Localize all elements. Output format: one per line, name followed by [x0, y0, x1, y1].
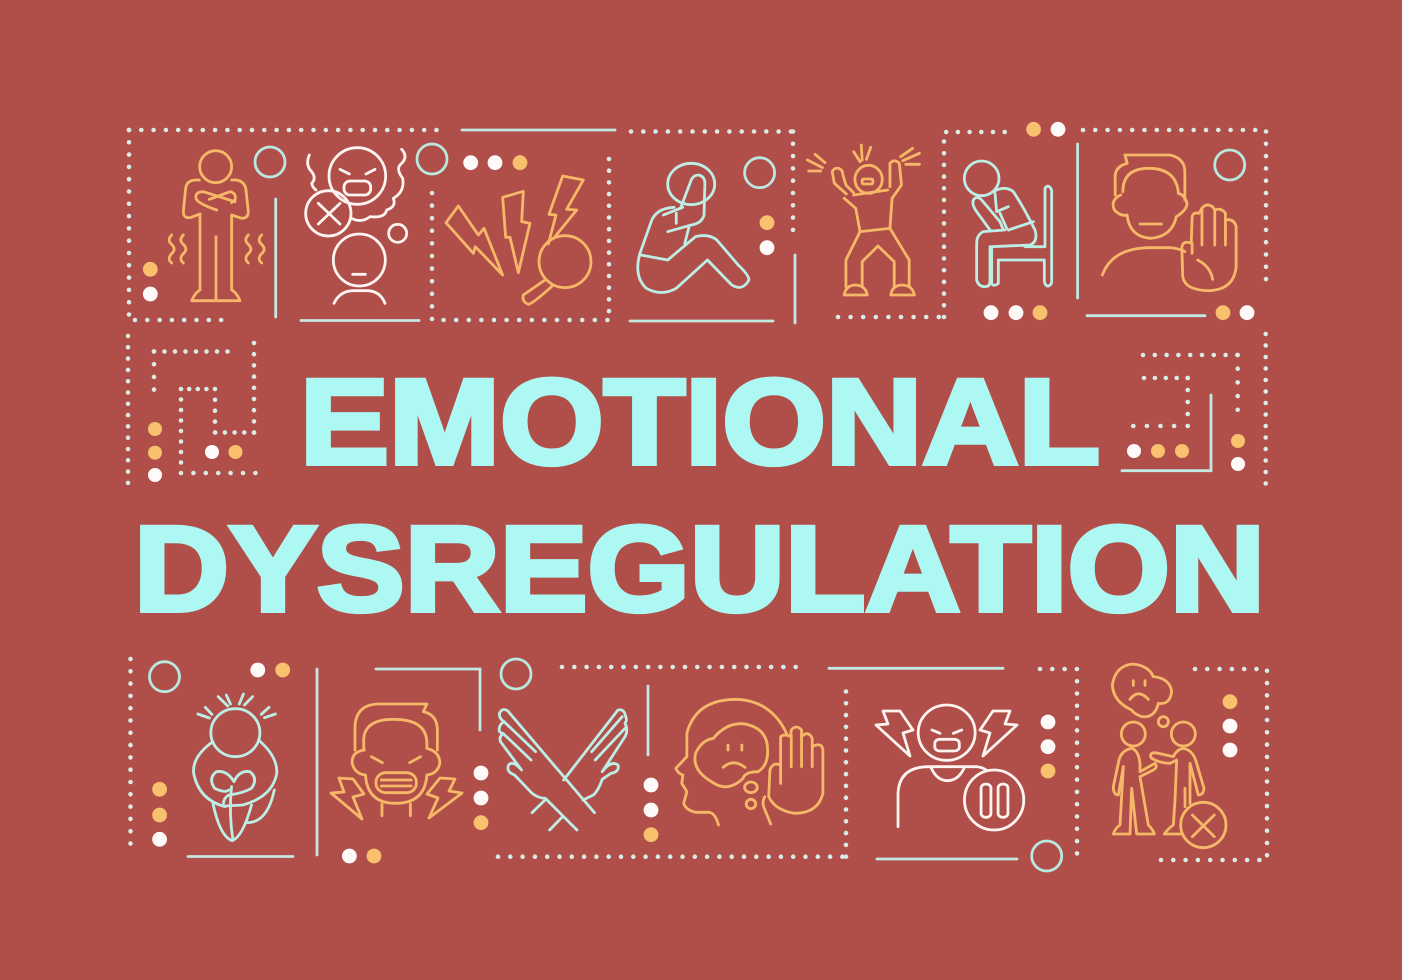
- icon: man with stop hand: [1102, 155, 1236, 291]
- title: [134, 354, 1265, 636]
- decorative frames top row: [129, 130, 1266, 323]
- icon: screaming person with raised arms: [807, 145, 919, 295]
- icon: yelling man with lightning bolts: [331, 704, 462, 819]
- icon: sad person sitting on chair: [964, 161, 1052, 287]
- icon: head with sad thought and stop hand: [676, 699, 823, 825]
- decorative frames bottom row: [130, 659, 1267, 871]
- icon: person hugging stomach in pain: [194, 694, 277, 841]
- icon: angry face over calm face: [306, 148, 407, 303]
- decorative dots top row: [143, 122, 1254, 320]
- icon: angry person with pause button: [876, 705, 1024, 830]
- icon: two people with sad thought and cross: [1112, 664, 1226, 848]
- decorative maze left: [128, 336, 256, 483]
- title: DYSREGULATION: [134, 500, 1265, 636]
- icon: person hugging self and shivering: [169, 151, 264, 301]
- icon: crossed arms with open hands: [499, 709, 627, 830]
- decorative maze right: [1122, 334, 1266, 484]
- icon: curled up person covering face: [638, 163, 749, 292]
- title: EMOTIONAL: [300, 354, 1100, 490]
- decorative dots bottom row: [152, 663, 1237, 863]
- icon: lightning bolts under magnifier: [446, 176, 591, 304]
